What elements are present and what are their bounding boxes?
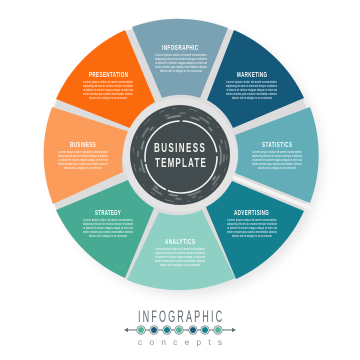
text block: infographic: minim veniam quis nostrud exercitation ullamco [155, 65, 207, 69]
text block: analytics: minim veniam quis nostrud exercitation ullamco [155, 259, 205, 263]
text block: presentation [83, 80, 134, 100]
text block: advertising: adipiscing elit sed do eiusmod tempor incididunt [227, 222, 277, 226]
text block: statistics: laboris nisi ut aliquip ex ea commodo [258, 166, 296, 170]
gap highlight [233, 177, 310, 208]
wheel shadow [53, 27, 321, 295]
text block: business: Lorem ipsum dolor sit amet consectetur [58, 150, 109, 154]
text block: statistics: ut labore et dolore magna aliqua ut enim ad [252, 158, 302, 162]
panel: analytics [127, 210, 235, 290]
text block: analytics [155, 247, 206, 267]
text block: analytics: ut labore et dolore magna aliqua ut enim ad [155, 255, 205, 259]
text block: strategy: Lorem ipsum dolor sit amet consectetur [83, 218, 134, 222]
heading: presentation: PRESENTATION [89, 71, 128, 79]
text block: strategy [83, 218, 134, 238]
text block: advertising: ut labore et dolore magna aliqua ut enim ad [227, 226, 277, 230]
text block: business: adipiscing elit sed do eiusmod tempor incididunt [58, 154, 108, 158]
text block: presentation: ut labore et dolore magna aliqua ut enim ad [83, 88, 133, 92]
text block: infographic: ut labore et dolore magna aliqua ut enim ad [155, 61, 207, 65]
text block: strategy: laboris nisi ut aliquip ex ea commodo [89, 234, 127, 238]
text block: strategy: ut labore et dolore magna aliqua ut enim ad [83, 226, 133, 230]
text block: analytics: laboris nisi ut aliquip ex ea commodo [160, 263, 200, 267]
footer subtitle: concepts [138, 337, 222, 347]
footer title: INFOGRAPHIC [138, 307, 222, 326]
text block: advertising: Lorem ipsum dolor sit amet consectetur [227, 218, 278, 222]
text block: marketing [226, 80, 278, 100]
text block: statistics: adipiscing elit sed do eiusmod tempor incididunt [252, 154, 302, 158]
text block: statistics: Lorem ipsum dolor sit amet consectetur [252, 150, 303, 154]
text block: presentation: Lorem ipsum dolor sit amet consectetur [83, 80, 134, 84]
text block: marketing: minim veniam quis nostrud exercitation ullamco [226, 92, 277, 96]
panel: presentation [56, 30, 155, 128]
text block: analytics: adipiscing elit sed do eiusmod tempor incididunt [155, 251, 205, 255]
panel: marketing [207, 30, 304, 128]
text block: strategy: adipiscing elit sed do eiusmod tempor incididunt [83, 222, 133, 226]
panel: strategy [56, 180, 154, 278]
text block: business: minim veniam quis nostrud exercitation ullamco [58, 162, 108, 166]
text block: statistics: minim veniam quis nostrud exercitation ullamco [252, 162, 302, 166]
heading: advertising: ADVERTISING [234, 209, 269, 217]
panel: advertising [206, 181, 304, 279]
text block: marketing: adipiscing elit sed do eiusmod tempor incididunt [226, 84, 277, 88]
text block: marketing: laboris nisi ut aliquip ex ea commodo [232, 96, 272, 100]
center title [154, 141, 206, 171]
panel: statistics [235, 107, 319, 203]
text block: presentation: adipiscing elit sed do eiusmod tempor incididunt [83, 84, 133, 88]
text block: presentation: minim veniam quis nostrud exercitation ullamco [83, 92, 133, 96]
text block: business [58, 150, 109, 170]
heading: statistics: STATISTICS [262, 141, 292, 149]
heading: strategy: STRATEGY [95, 209, 121, 217]
text block: presentation: laboris nisi ut aliquip ex ea commodo [89, 96, 127, 100]
text block: business: ut labore et dolore magna aliqua ut enim ad [58, 158, 108, 162]
panel: business [44, 107, 130, 204]
text block: statistics [252, 150, 303, 170]
wheel base with grey gaps [45, 20, 315, 290]
text block: analytics: Lorem ipsum dolor sit amet consectetur [155, 247, 206, 251]
panel: infographic [132, 19, 228, 98]
heading: marketing: MARKETING [237, 71, 267, 79]
text block: infographic: adipiscing elit sed do eiusmod tempor incididunt [155, 57, 207, 61]
text block: advertising [227, 218, 278, 238]
heading: analytics: ANALYTICS [165, 238, 195, 246]
heading: business: BUSINESS [70, 141, 96, 149]
text block: advertising: laboris nisi ut aliquip ex ea commodo [232, 234, 272, 238]
heading: infographic: INFOGRAPHIC [162, 44, 198, 52]
text block: advertising: minim veniam quis nostrud exercitation ullamco [227, 230, 277, 234]
footer timeline icon [124, 326, 236, 334]
text block: infographic [155, 53, 208, 73]
text block: marketing: Lorem ipsum dolor sit amet consectetur [226, 80, 278, 84]
center title: TEMPLATE [155, 156, 206, 171]
text block: strategy: minim veniam quis nostrud exercitation ullamco [83, 230, 133, 234]
central badge [123, 98, 237, 212]
text block: infographic: laboris nisi ut aliquip ex ea commodo [160, 69, 202, 73]
text block: business: laboris nisi ut aliquip ex ea commodo [64, 166, 102, 170]
text block: marketing: ut labore et dolore magna aliqua ut enim ad [226, 88, 277, 92]
text block: infographic: Lorem ipsum dolor sit amet consectetur [155, 53, 208, 57]
center title: BUSINESS [154, 141, 205, 156]
